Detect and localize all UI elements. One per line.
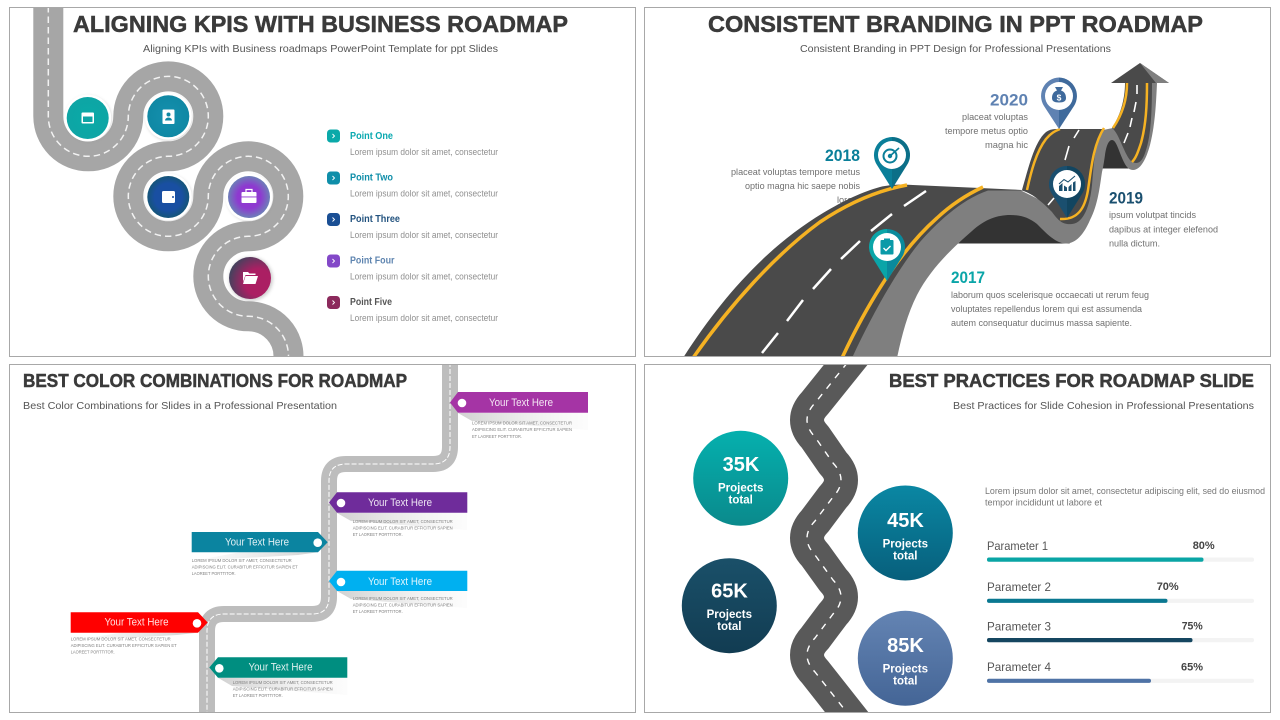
text: 2018: 2018 (825, 146, 860, 165)
stat circle: 45K: Projects (883, 538, 928, 550)
title: BEST PRACTICES FOR ROADMAP SLIDE (889, 371, 1254, 391)
text: 2019: dapibus at integer elefenod (1109, 224, 1218, 234)
ribbon: green: Your Text Here (248, 662, 312, 674)
ribbon: magenta: ADIPISCING ELIT. CURABITUR EFFICITUR SAPIEN (472, 427, 572, 432)
text: 2017: autem consequatur ducimus massa sapiente. (951, 318, 1132, 328)
stat circle: 85K: total (893, 676, 917, 688)
stat circle: 45K (858, 486, 953, 580)
list: point three: Point Three (350, 213, 400, 225)
stat circle: 85K: 85K (887, 635, 924, 657)
panel: best color combinations for roadmap (10, 362, 636, 716)
ribbon: teal blue: Your Text Here (225, 536, 289, 548)
description text: tempor incididunt ut labore et (985, 497, 1102, 507)
icon: calendar circle (64, 94, 112, 142)
ribbon: teal blue (192, 532, 328, 576)
text: 2018: lorem (837, 195, 860, 205)
ribbon: green: LOREM IPSUM DOLOR SIT AMET, CONSECTETUR (233, 680, 333, 685)
list: point two: Lorem ipsum dolor sit amet, consectetur (350, 188, 498, 198)
text: 2017: laborum quos scelerisque occaecati ut rerum feug (951, 290, 1149, 300)
pin: 2017 clipboard (869, 229, 905, 281)
ribbon: red: ADIPISCING ELIT. CURABITUR EFFICITUR SAPIEN ET (71, 643, 177, 648)
stat circle: 35K: total (729, 494, 753, 506)
stat circle: 35K: Projects (718, 482, 763, 494)
subtitle: Best Practices for Slide Cohesion in Professional Presentations (953, 400, 1254, 412)
text: 2020: 2020 (990, 90, 1028, 110)
list: point one: Lorem ipsum dolor sit amet, consectetur (350, 147, 498, 157)
progress bar: parameter 2 (987, 580, 1254, 603)
ribbon: magenta (450, 392, 588, 439)
progress bar: parameter 4 (987, 660, 1254, 683)
description text: Lorem ipsum dolor sit amet, consectetur adipiscing elit, sed do eiusmod (985, 486, 1265, 496)
list: point four (327, 254, 498, 282)
text: 2020: tempore metus optio (945, 126, 1028, 136)
ribbon: sky blue: Your Text Here (368, 576, 432, 588)
progress bar: parameter 2: Parameter 2 (987, 580, 1051, 594)
text: 2018: optio magna hic saepe nobis (745, 181, 860, 191)
pin: 2020 money bag: $ (1057, 92, 1062, 102)
text: 2019: ipsum volutpat tincids (1109, 210, 1196, 220)
icon: folder circle (229, 257, 273, 301)
stat circle: 85K (858, 611, 953, 706)
ribbon: teal blue: LAOREET PORTTITOR. (192, 571, 236, 576)
ribbon: red: LAOREET PORTTITOR. (71, 650, 115, 654)
list: point four: Point Four (350, 254, 394, 266)
stat circle: 35K (693, 431, 788, 526)
3D wavy road with arrow (683, 63, 1169, 358)
stat circle: 65K (682, 558, 777, 653)
text: 2017: voluptates repellendus lorem qui est assumenda (951, 304, 1143, 314)
panel: best practices for roadmap slide (644, 352, 1270, 720)
progress bar: parameter 3: Parameter 3 (987, 619, 1051, 633)
ribbon: red (71, 612, 208, 654)
stat circle: 35K: 35K (723, 454, 760, 476)
ribbon: teal blue: LOREM IPSUM DOLOR SIT AMET, CONSECTETUR (192, 558, 292, 563)
stat circle: 65K: 65K (711, 580, 748, 602)
progress bar: parameter 1: 80% (1193, 540, 1215, 552)
light grey road (207, 362, 450, 716)
text: 2020 (945, 90, 1028, 150)
text: 2020: placeat voluptas (962, 112, 1028, 122)
progress bar: parameter 1 (987, 539, 1254, 562)
ribbon: teal blue: ADIPISCING ELIT. CURABITUR EFFICITUR SAPIEN ET (192, 564, 298, 570)
stat circle: 65K: total (717, 621, 741, 633)
winding grey road (48, 6, 288, 360)
text: 2017: 2017 (951, 268, 985, 287)
ribbon: purple: ET LAOREET PORTTITOR. (353, 532, 403, 537)
stat circle: 45K: total (893, 550, 917, 562)
panel: consistent branding in ppt roadmap (644, 8, 1270, 358)
stat circle: 45K: 45K (887, 510, 924, 532)
ribbon: green: ADIPISCING ELIT. CURABITUR EFFICITUR SAPIEN (233, 686, 333, 692)
ribbon: sky blue: ET LAOREET PORTTITOR. (353, 609, 403, 614)
ribbon: sky blue: LOREM IPSUM DOLOR SIT AMET, CONSECTETUR (353, 596, 453, 601)
ribbon: red: Your Text Here (104, 616, 168, 628)
list: point three: Lorem ipsum dolor sit amet, consectetur (350, 230, 498, 240)
text: 2019: nulla dictum. (1109, 238, 1160, 248)
list: point five (327, 296, 498, 323)
description text (985, 486, 1265, 507)
panel: aligning KPIs with business roadmap (10, 6, 636, 360)
zigzag dark road (807, 352, 856, 720)
ribbon: green: ET LAOREET PORTTITOR. (233, 693, 283, 698)
title: BEST COLOR COMBINATIONS FOR ROADMAP (23, 371, 407, 391)
title: CONSISTENT BRANDING IN PPT ROADMAP (708, 11, 1203, 37)
progress bar: parameter 2: 70% (1157, 581, 1179, 593)
icon: briefcase circle (226, 174, 273, 221)
pin: 2019 chart (1049, 166, 1085, 218)
ribbon: sky blue (329, 571, 467, 614)
text: 2017 (951, 268, 1149, 328)
list: point one (327, 130, 498, 157)
icon: wallet circle (145, 174, 192, 221)
ribbon: sky blue: ADIPISCING ELIT. CURABITUR EFFICITUR SAPIEN (353, 602, 453, 608)
ribbon: purple: Your Text Here (368, 497, 432, 509)
ribbon: purple: LOREM IPSUM DOLOR SIT AMET, CONSECTETUR (353, 519, 453, 524)
text: 2020: magna hic (985, 140, 1028, 150)
title: ALIGNING KPIS WITH BUSINESS ROADMAP (73, 11, 568, 37)
ribbon: purple: ADIPISCING ELIT. CURABITUR EFFICITUR SAPIEN (353, 526, 453, 530)
list: point one: Point One (350, 130, 393, 142)
list: point five: Lorem ipsum dolor sit amet, consectetur (350, 313, 498, 323)
list: point two: Point Two (350, 172, 393, 184)
stat circle: 65K: Projects (707, 609, 752, 621)
progress bar: parameter 4: Parameter 4 (987, 660, 1051, 674)
progress bar: parameter 1: Parameter 1 (987, 539, 1048, 553)
icon: contact book circle (145, 93, 192, 140)
subtitle: Best Color Combinations for Slides in a Professional Presentation (23, 400, 337, 412)
pin: 2018 target (874, 137, 910, 189)
progress bar: parameter 3: 75% (1182, 621, 1203, 633)
list: point four: Lorem ipsum dolor sit amet, consectetur (350, 272, 498, 282)
stat circle: 85K: Projects (883, 664, 928, 676)
progress bar: parameter 4: 65% (1181, 661, 1203, 673)
text: 2018: placeat voluptas tempore metus (731, 167, 860, 177)
text: 2018 (731, 146, 860, 205)
list: point two (327, 172, 498, 198)
ribbon: purple (329, 492, 467, 537)
text: 2019: 2019 (1109, 188, 1143, 208)
list: point three (327, 213, 498, 240)
ribbon: green (209, 657, 347, 698)
ribbon: magenta: ET LAOREET PORTTITOR. (472, 434, 522, 439)
list: point five: Point Five (350, 296, 392, 308)
ribbon: magenta: LOREM IPSUM DOLOR SIT AMET, CONSECTETUR (472, 420, 573, 426)
subtitle: Aligning KPIs with Business roadmaps PowerPoint Template for ppt Slides (143, 43, 498, 55)
progress bar: parameter 3 (987, 619, 1254, 642)
text: 2019 (1109, 188, 1218, 248)
subtitle: Consistent Branding in PPT Design for Professional Presentations (800, 43, 1111, 55)
ribbon: magenta: Your Text Here (489, 397, 553, 409)
pin: 2020 money bag (1041, 78, 1077, 129)
ribbon: red: LOREM IPSUM DOLOR SIT AMET, CONSECTETUR (71, 636, 171, 642)
